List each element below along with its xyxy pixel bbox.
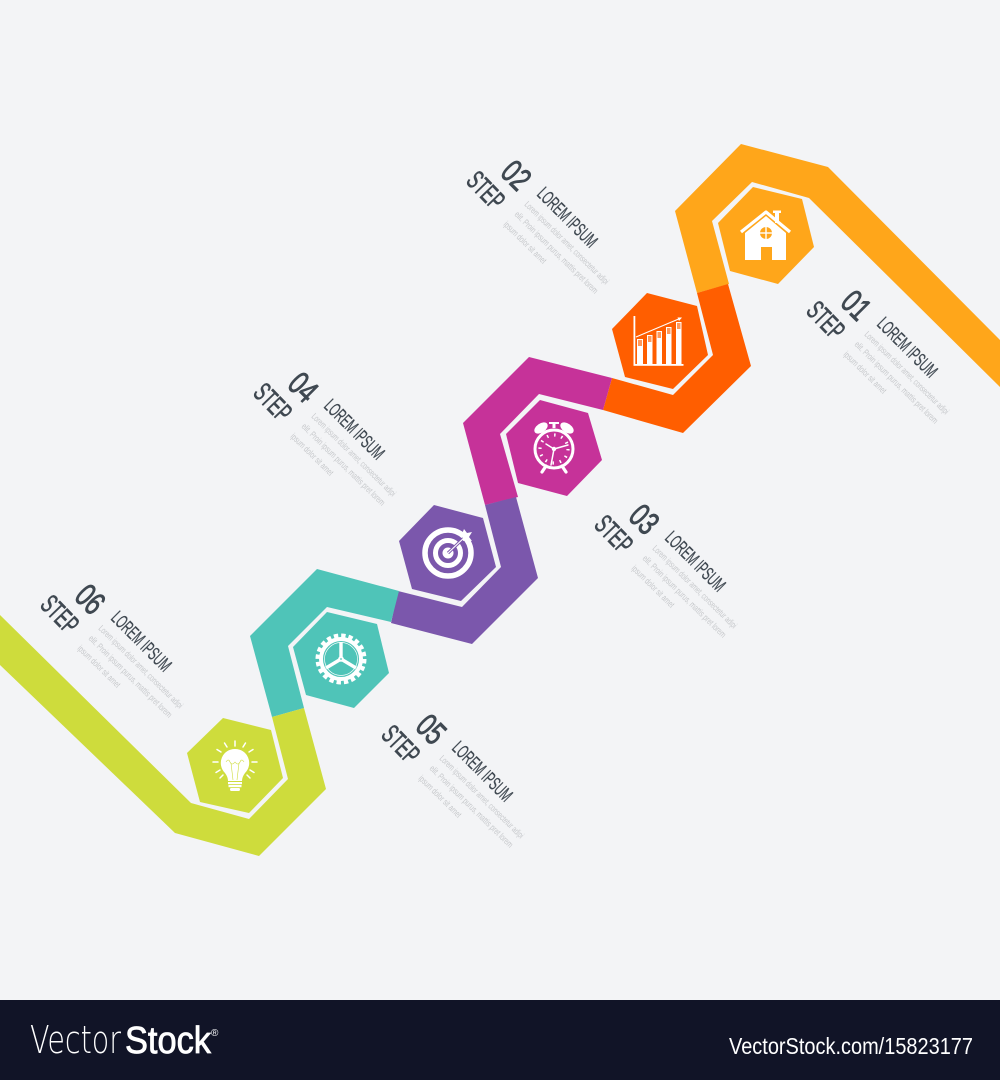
path segment: step 4 purple bbox=[391, 497, 538, 644]
footer: watermark bar: Stock bbox=[125, 1020, 212, 1062]
label: step 01: LOREM IPSUM bbox=[872, 314, 941, 382]
path segment: step 5 teal bbox=[250, 569, 399, 717]
icon: gear bbox=[318, 636, 364, 682]
label: step 01: Lorem ipsum dolor amet, consectetur adipi bbox=[863, 329, 951, 416]
hexagon: step 6 bbox=[187, 718, 283, 813]
label: step 06: elit. Proin ipsum purus, mattis pret lorem bbox=[87, 633, 174, 720]
label: step 03: Lorem ipsum dolor amet, consectetur adipi bbox=[651, 543, 739, 630]
path segment: step 3 magenta bbox=[463, 357, 612, 505]
label: step 01: ipsum dolor sit amet bbox=[842, 349, 889, 396]
label: step 03 bbox=[589, 497, 739, 640]
label: step 05: 05 bbox=[409, 707, 454, 751]
label: step 02: 02 bbox=[494, 153, 539, 197]
path segment: step 2 red-orange bbox=[603, 284, 751, 433]
label: step 04: ipsum dolor sit amet bbox=[289, 431, 336, 478]
label: step 05: LOREM IPSUM bbox=[447, 738, 516, 806]
hexagon: step 5 bbox=[293, 612, 389, 708]
label: step 05: Lorem ipsum dolor amet, consectetur adipi bbox=[438, 753, 526, 840]
footer: watermark bar: ® bbox=[211, 1028, 219, 1039]
label: step 04: LOREM IPSUM bbox=[319, 396, 388, 464]
label: step 01: elit. Proin ipsum purus, mattis pret lorem bbox=[853, 339, 940, 426]
footer: watermark bar bbox=[0, 1000, 1000, 1080]
label: step 05: elit. Proin ipsum purus, mattis pret lorem bbox=[428, 763, 515, 850]
label: step 03: 03 bbox=[622, 497, 667, 541]
label: step 04: STEP bbox=[248, 377, 298, 428]
hexagon: step 1 bbox=[718, 187, 814, 284]
label: step 03: ipsum dolor sit amet bbox=[630, 563, 677, 610]
label: step 04 bbox=[248, 365, 398, 508]
label: step 01: STEP bbox=[801, 295, 851, 346]
label: step 02: STEP bbox=[461, 165, 511, 216]
label: step 06: STEP bbox=[35, 589, 85, 640]
label: step 01: 01 bbox=[834, 283, 879, 327]
label: step 06: LOREM IPSUM bbox=[106, 608, 175, 676]
label: step 04: 04 bbox=[281, 365, 326, 409]
icon: bar chart bbox=[634, 316, 684, 366]
label: step 03: STEP bbox=[589, 509, 639, 560]
footer: watermark bar: Vector bbox=[30, 1018, 121, 1062]
label: step 02: Lorem ipsum dolor amet, consectetur adipi bbox=[523, 199, 611, 286]
label: step 06: ipsum dolor sit amet bbox=[76, 643, 123, 690]
label: step 06: Lorem ipsum dolor amet, consectetur adipi bbox=[97, 623, 185, 710]
label: step 06 bbox=[35, 577, 185, 720]
path segment: step 6 lime bbox=[0, 615, 326, 856]
hexagon: step 4 bbox=[399, 505, 496, 601]
label: step 03: LOREM IPSUM bbox=[660, 528, 729, 596]
label: step 03: elit. Proin ipsum purus, mattis pret lorem bbox=[641, 553, 728, 640]
label: step 01 bbox=[801, 283, 951, 426]
hexagon: step 3 bbox=[506, 400, 602, 496]
hexagon: step 2 bbox=[612, 293, 708, 389]
label: step 04: Lorem ipsum dolor amet, consectetur adipi bbox=[310, 411, 398, 498]
label: step 05 bbox=[376, 707, 526, 850]
label: step 04: elit. Proin ipsum purus, mattis pret lorem bbox=[300, 421, 387, 508]
label: step 02: elit. Proin ipsum purus, mattis pret lorem bbox=[513, 209, 600, 296]
icon: alarm clock bbox=[532, 420, 576, 472]
icon: house bbox=[741, 210, 790, 260]
label: step 02: ipsum dolor sit amet bbox=[502, 219, 549, 266]
icon: light bulb bbox=[213, 741, 257, 791]
label: step 06: 06 bbox=[68, 577, 113, 621]
label: step 02: LOREM IPSUM bbox=[532, 184, 601, 252]
label: step 02 bbox=[461, 153, 611, 296]
icon: target bbox=[425, 529, 472, 576]
path segment: step 1 orange bbox=[675, 144, 1000, 387]
label: step 05: STEP bbox=[376, 719, 426, 770]
label: step 05: ipsum dolor sit amet bbox=[417, 773, 464, 820]
